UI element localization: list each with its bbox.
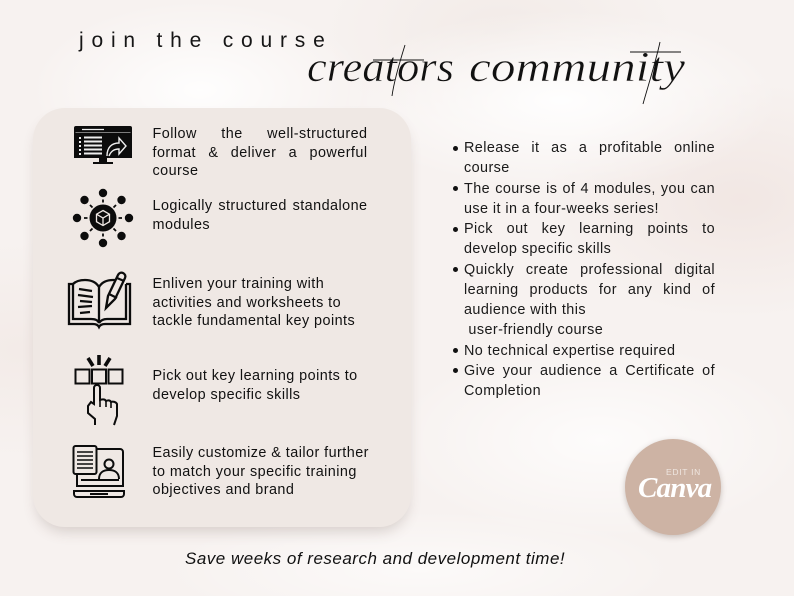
bullet list: course benefits: [453, 140, 715, 399]
bullet list: course benefits: The course is of 4 modules, you can: [464, 180, 715, 196]
text: activities and worksheets: tackle fundamental key points: [152, 313, 355, 329]
text: activities and worksheets: activities and worksheets to: [152, 294, 341, 310]
heading: creators community script: [307, 42, 685, 104]
footer tagline: Save weeks of research and development time!: [185, 549, 565, 568]
icon: document and online instructor on laptop: [72, 445, 125, 498]
bullet list: course benefits: Pick out key learning points to: [464, 221, 715, 237]
text: key learning points: [152, 368, 358, 402]
text: standalone modules: [152, 198, 368, 232]
text: standalone modules: Logically structured standalone: [152, 198, 368, 214]
badge: edit in Canva: Canva: [638, 472, 711, 504]
text: activities and worksheets: Enliven your training with: [152, 276, 324, 292]
text: customize and tailor: [152, 445, 369, 498]
text: well-structured format: course: [152, 163, 198, 179]
icon: tapping hand on three boxes: [74, 355, 124, 426]
text: activities and worksheets: [152, 276, 355, 329]
text: customize and tailor: objectives and brand: [152, 482, 294, 498]
text: standalone modules: modules: [152, 216, 210, 232]
panel: features: [33, 108, 411, 527]
bullet list: course benefits: Quickly create professional digital: [464, 262, 715, 278]
text: customize and tailor: to match your specific training: [152, 464, 357, 480]
text: customize and tailor: Easily customize & tailor further: [152, 445, 369, 461]
bullet list: course benefits: audience with this: [464, 302, 586, 318]
icon: screen with share arrow: [74, 126, 132, 164]
bullet list: course benefits: Give your audience a Certificate of: [464, 363, 715, 379]
text: well-structured format: Follow the well-structured: [152, 126, 368, 142]
text: key learning points: Pick out key learning points to: [152, 368, 358, 384]
heading: creators community script: creators: [307, 45, 454, 91]
bullet list: course benefits: user-friendly course: [468, 322, 603, 338]
badge: edit in Canva: [625, 439, 721, 535]
bullet list: course benefits: Release it as a profitable online: [464, 140, 715, 156]
bullet list: course benefits: develop specific skills: [464, 241, 611, 257]
bullet list: course benefits: Completion: [464, 383, 541, 399]
text: well-structured format: [152, 126, 368, 179]
heading: creators community script: community: [469, 45, 685, 91]
icon: open book with pen: [68, 272, 132, 330]
bullet list: course benefits: learning products for any kind of: [464, 282, 715, 298]
icon: hexagon modules network: [72, 188, 134, 248]
heading: join the course: join the course: [79, 29, 333, 52]
bullet list: course benefits: use it in a four-weeks series!: [464, 201, 659, 217]
badge: edit in Canva: EDIT IN: [666, 467, 701, 477]
text: key learning points: develop specific skills: [152, 386, 300, 402]
bullet list: course benefits: course: [464, 160, 510, 176]
text: well-structured format: format & deliver a powerful: [152, 144, 368, 160]
bullet list: course benefits: No technical expertise required: [464, 342, 675, 358]
